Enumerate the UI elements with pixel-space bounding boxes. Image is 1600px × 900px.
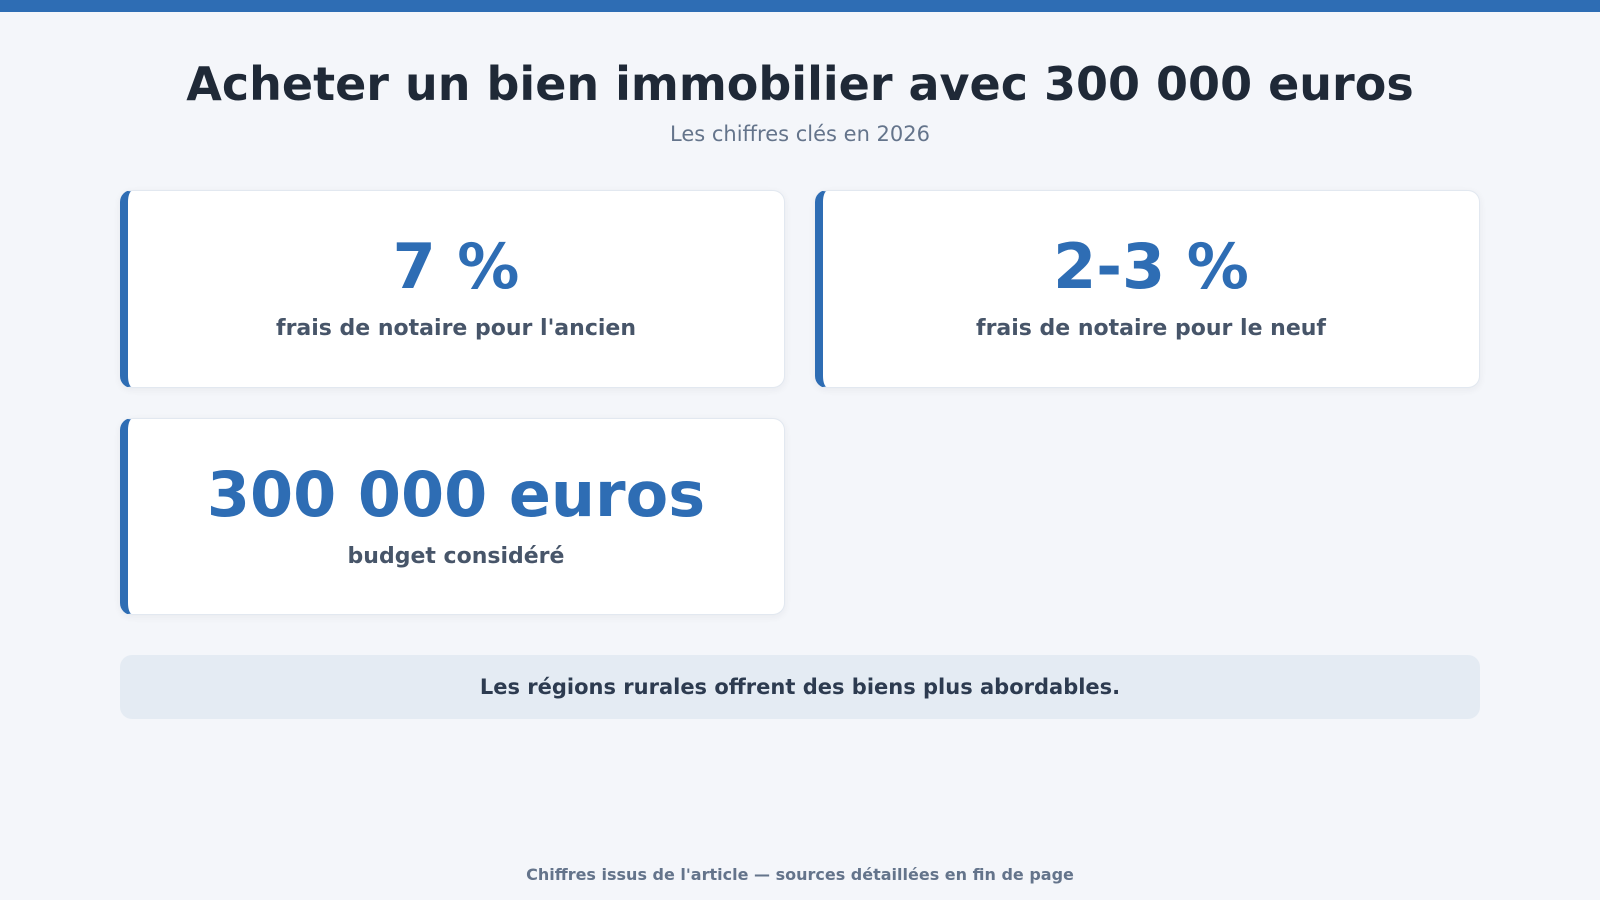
stat label: older property: frais de notaire pour l'ancien (276, 316, 636, 341)
stat label: budget: budget considéré (348, 544, 564, 569)
stat value: 300 000 euros: 300 000 euros (207, 458, 705, 531)
panel: notary fees for older property (120, 190, 785, 388)
footer source note: Chiffres issus de l'article — sources détaillées en fin de page (526, 865, 1074, 884)
subtitle: Les chiffres clés en 2026 (670, 122, 930, 146)
callout: Les régions rurales offrent des biens plus abordables. (480, 675, 1120, 699)
stat value: 2-3 %: 2-3 % (1053, 230, 1249, 303)
stat label: new property: frais de notaire pour le neuf (976, 316, 1326, 341)
panel: budget (120, 418, 785, 615)
callout (120, 655, 1480, 719)
stat value: 7 %: 7 % (393, 230, 519, 303)
panel: notary fees for new property (815, 190, 1480, 388)
title: Acheter un bien immobilier avec 300 000 euros (186, 57, 1414, 111)
top accent bar (0, 0, 1600, 12)
